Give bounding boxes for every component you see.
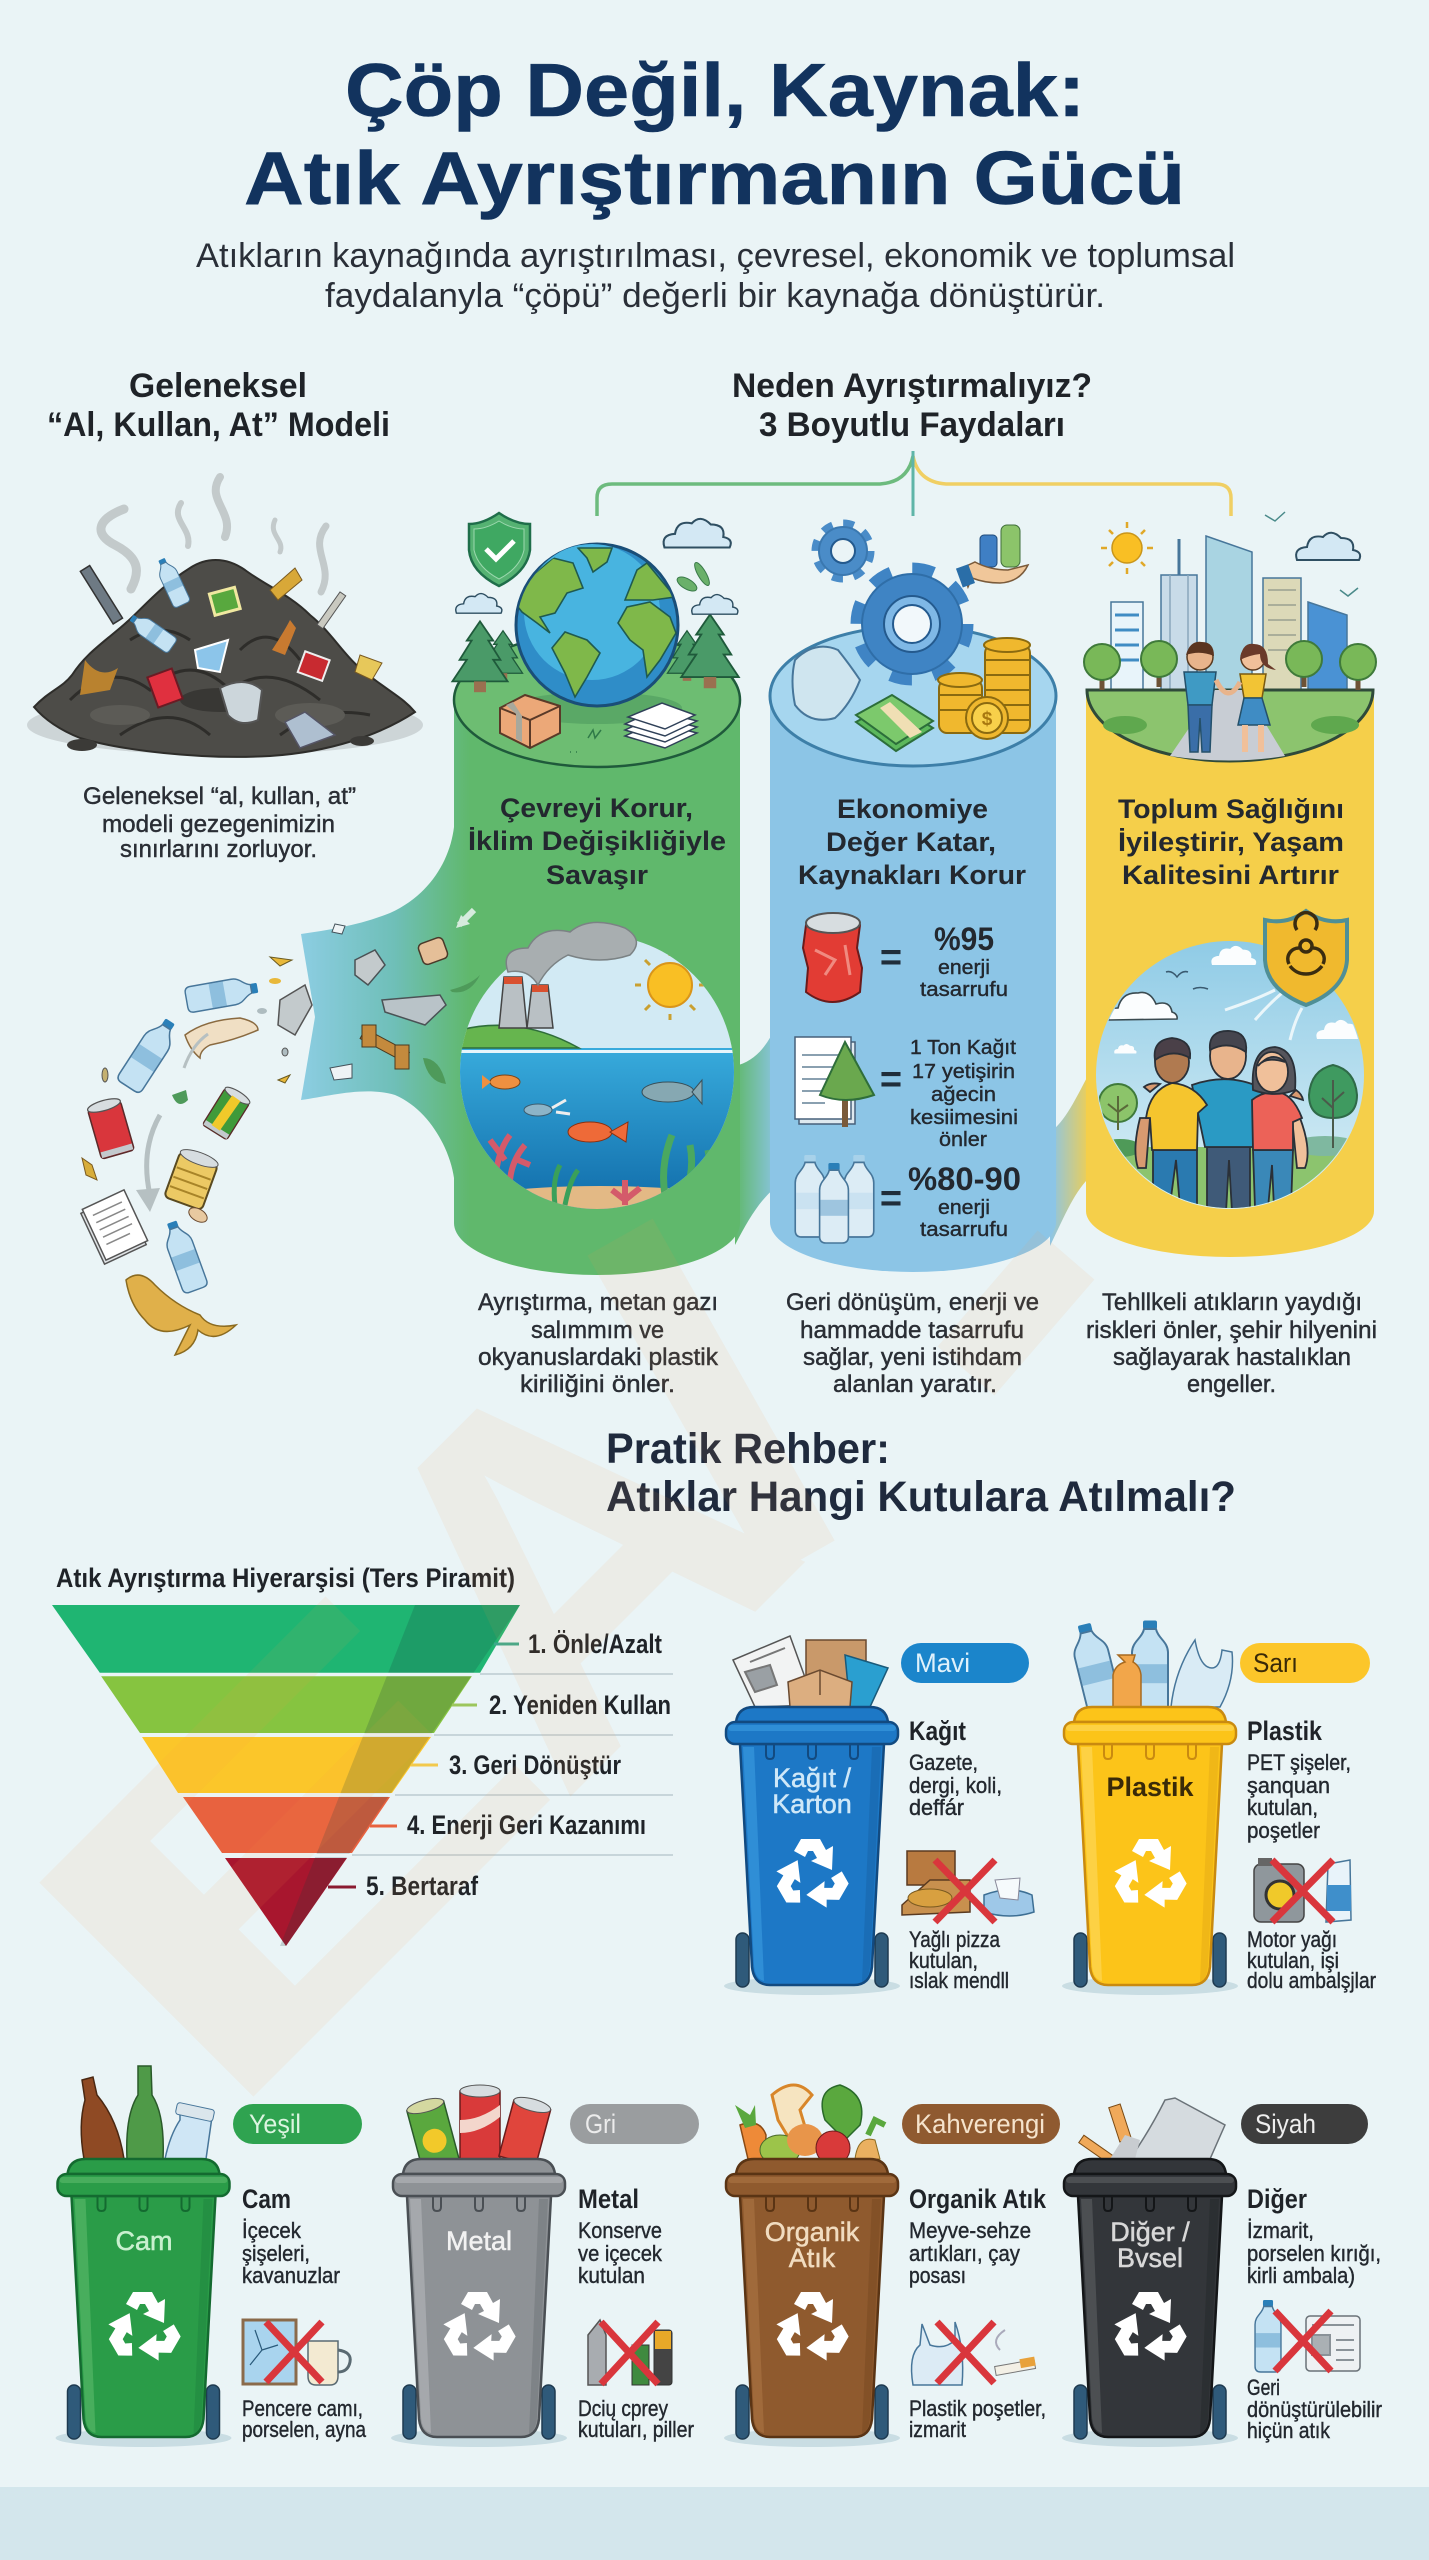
icon: biohazard shield <box>1265 911 1347 1005</box>
text: accepted paper: Gazete, <box>909 1750 978 1775</box>
text: accepted organic: Meyve-sehze <box>909 2218 1031 2243</box>
text: society heading <box>1118 794 1344 890</box>
label 5: 5. Bertaraf <box>366 1871 479 1901</box>
pill: Siyah: Siyah <box>1255 2109 1316 2139</box>
icon: not allowed bottle and newspaper <box>1255 2300 1360 2372</box>
caption: traditional model: Geleneksel “al, kullan, at” <box>83 783 356 810</box>
icon: paper stack <box>625 703 697 748</box>
text: economy heading: Kaynakları Korur <box>798 860 1027 890</box>
icon: bottles <box>795 1155 874 1243</box>
text block: environment description: kiriliğini önler. <box>520 1371 675 1398</box>
bin label: Cam <box>115 2226 173 2256</box>
text: accepted glass <box>242 2184 340 2288</box>
text block: economy description: alanlan yaratır. <box>833 1371 997 1398</box>
label 3: 3. Geri Dönüştür <box>449 1750 621 1780</box>
illustration: city with couple <box>1084 512 1376 761</box>
stat: paper and trees: ağecin <box>931 1084 996 1106</box>
panel: gray metal bin <box>391 2085 699 2447</box>
panel: society column <box>1084 512 1376 1257</box>
text block: environment description: okyanuslardaki plastik <box>478 1344 719 1371</box>
bin label: Metal <box>446 2226 512 2256</box>
heading: traditional model: “Al, Kullan, At” Modeli <box>47 406 390 444</box>
blue bin <box>724 1707 900 1995</box>
bin contents: metal cans <box>405 2085 552 2171</box>
text: rejected paper items: ıslak mendll <box>909 1968 1009 1993</box>
icon: money bundle <box>856 695 933 751</box>
brown bin <box>724 2159 900 2447</box>
title: Atık Ayrıştırmanın Gücü <box>244 136 1185 220</box>
watermark: A <box>245 1236 889 1880</box>
heading: why separate: 3 Boyutlu Faydaları <box>759 406 1065 444</box>
text block: environment description <box>478 1289 719 1398</box>
bin label: Plastik <box>1106 1772 1195 1802</box>
caption: traditional model <box>83 783 356 863</box>
disk with globe <box>452 513 740 767</box>
text: environment heading: Çevreyi Korur, <box>500 793 693 823</box>
heading: practical guide <box>606 1425 1236 1521</box>
text: accepted glass: Cam <box>242 2184 291 2214</box>
icon: recycle <box>770 2292 852 2364</box>
text block: economy description: sağlar, yeni istihdam <box>803 1344 1022 1371</box>
icon: not allowed bag and cigarette <box>912 2322 1036 2385</box>
text: environment heading: Savaşır <box>546 860 649 890</box>
subtitle <box>196 237 1235 315</box>
text: rejected glass items <box>242 2396 367 2442</box>
stat: plastic bottles: %80-90 <box>908 1161 1021 1197</box>
illustration: garbage pile <box>27 477 423 757</box>
subtitle: Atıkların kaynağında ayrıştırılması, çevresel, ekonomik ve toplumsal <box>196 237 1235 275</box>
heading: traditional model: Geleneksel <box>129 367 307 405</box>
text: accepted paper <box>909 1716 1002 1820</box>
label 1: 1. Önle/Azalt <box>528 1629 662 1659</box>
illustration: funnel floating waste <box>330 910 480 1084</box>
text: accepted organic: artıkları, çay <box>909 2241 1020 2266</box>
caption: traditional model: modeli gezegenimizin <box>102 811 335 838</box>
icon: large gear <box>857 569 967 679</box>
icon: small gear <box>816 524 870 578</box>
text: accepted organic: Organik Atık <box>909 2184 1047 2214</box>
heading: why separate <box>732 367 1092 444</box>
black bin <box>1062 2159 1238 2447</box>
bin label: Diğer / <box>1110 2217 1190 2247</box>
text: rejected organic items <box>909 2396 1046 2442</box>
bin label: Atık <box>789 2243 836 2273</box>
icon: sun <box>1101 522 1153 574</box>
text block: society description: engeller. <box>1187 1371 1276 1398</box>
pill: Sarı <box>1240 1643 1370 1683</box>
bracket connecting heading to three columns <box>597 451 1231 516</box>
text: accepted metal: Konserve <box>578 2218 662 2243</box>
subtitle: faydalanyla “çöpü” değerli bir kaynağa dönüştürür. <box>325 277 1105 315</box>
bin label: Karton <box>772 1789 852 1819</box>
bin label: Bvsel <box>1117 2243 1183 2273</box>
icon: trees <box>452 614 739 692</box>
stat: plastic bottles <box>795 1155 1021 1243</box>
connecting band: green to blue <box>735 1028 775 1245</box>
icon: not allowed pizza box and tissue <box>902 1851 1034 1922</box>
text: rejected other items: hiçün atık <box>1247 2418 1331 2443</box>
heading: practical guide: Atıklar Hangi Kutulara Atılmalı? <box>606 1473 1236 1521</box>
pyramid level 2 <box>101 1676 472 1733</box>
text: accepted organic <box>909 2184 1047 2288</box>
icon: not allowed spray and batteries <box>588 2320 672 2385</box>
text: society heading: Toplum Sağlığını <box>1118 794 1344 824</box>
panel: green glass bin <box>56 2066 367 2447</box>
illustration: healthy people circle <box>1096 941 1364 1217</box>
connecting band: blue to yellow <box>1050 1068 1092 1246</box>
chart title: Atık Ayrıştırma Hiyerarşisi (Ters Piramit) <box>56 1563 515 1593</box>
text: rejected paper items: kutulan, <box>909 1948 978 1973</box>
pill: Siyah <box>1241 2104 1368 2144</box>
icon: paper and tree <box>795 1037 874 1127</box>
text: rejected plastic items: dolu ambalşjlar <box>1247 1968 1376 1993</box>
bin label <box>772 1763 852 1819</box>
bin contents: plastic <box>1068 1620 1232 1716</box>
label 4: 4. Enerji Geri Kazanımı <box>407 1810 646 1840</box>
text: accepted other: İzmarit, <box>1247 2218 1314 2243</box>
text: environment heading <box>468 793 726 890</box>
icon: coins <box>938 638 1030 739</box>
icon: three people <box>1135 1031 1308 1212</box>
text: accepted other: porselen kırığı, <box>1247 2241 1381 2266</box>
text: accepted glass: kavanuzlar <box>242 2263 340 2288</box>
pyramid level 1 <box>52 1605 520 1673</box>
text: rejected metal items <box>578 2396 694 2442</box>
panel: black general waste bin <box>1062 2098 1382 2447</box>
disk with gears <box>770 524 1056 766</box>
text: accepted plastic: Plastik <box>1247 1716 1323 1746</box>
text: rejected other items <box>1247 2375 1382 2443</box>
stat: paper and trees: = <box>880 1059 902 1101</box>
illustration: scattered waste stream <box>80 957 312 1355</box>
green bin <box>56 2159 232 2447</box>
icon: not allowed oil can and carton <box>1254 1858 1351 1922</box>
stat: aluminium can: %95 <box>934 921 994 957</box>
text block: economy description <box>786 1289 1039 1398</box>
heading: why separate: Neden Ayrıştırmalıyız? <box>732 367 1092 405</box>
text: rejected glass items: porselen, ayna <box>242 2417 367 2442</box>
pill: Mavi: Mavi <box>915 1648 970 1678</box>
text: accepted glass: şişeleri, <box>242 2241 310 2266</box>
text: rejected organic items: Plastik poşetler, <box>909 2396 1046 2421</box>
text: accepted plastic: poşetler <box>1247 1818 1320 1843</box>
text: rejected plastic items <box>1247 1927 1376 1993</box>
stat: paper and trees: önler <box>939 1129 987 1151</box>
stat: aluminium can <box>803 913 1008 1002</box>
icon: hand with bottles <box>956 525 1028 587</box>
stat: paper and trees: 1 Ton Kağıt <box>910 1037 1016 1059</box>
text: rejected other items: dönüştürülebilir <box>1247 2397 1382 2422</box>
icon: leaves <box>675 561 712 594</box>
chart: waste hierarchy inverted pyramid <box>52 1563 673 1946</box>
text block: society description: Tehllkeli atıkların yaydığı <box>1102 1289 1362 1316</box>
icon: clouds <box>456 519 738 614</box>
icon: not allowed window and mug <box>243 2320 350 2385</box>
pill: Gri <box>570 2104 699 2144</box>
bin contents: general waste <box>1079 2098 1225 2166</box>
text block: economy description: hammadde tasarrufu <box>800 1317 1024 1344</box>
text: rejected metal items: kutuları, piller <box>578 2417 694 2442</box>
panel: economy column <box>770 524 1056 1272</box>
stat: plastic bottles: tasarrufu <box>920 1219 1008 1241</box>
text: rejected metal items: Dcių cprey <box>578 2396 668 2421</box>
pill: Kahverengi: Kahverengi <box>915 2109 1045 2139</box>
text: accepted paper: deffár <box>909 1795 964 1820</box>
panel: yellow plastic bin <box>1062 1620 1376 1995</box>
bin contents: glass <box>81 2066 215 2159</box>
text: rejected glass items: Pencere camı, <box>242 2396 363 2421</box>
text block: society description: sağlayarak hastalıklan <box>1113 1344 1351 1371</box>
text: environment heading: İklim Değişikliğiyle <box>468 826 726 856</box>
text: rejected organic items: izmarit <box>909 2417 966 2442</box>
label 2: 2. Yeniden Kullan <box>489 1690 671 1720</box>
bin contents: paper <box>733 1636 888 1707</box>
title <box>244 48 1185 220</box>
watermark <box>0 1236 1066 2198</box>
icon: globe <box>516 544 678 706</box>
pyramid level 3 <box>142 1737 431 1793</box>
stat: plastic bottles: = <box>880 1178 902 1220</box>
text: accepted plastic: şanquan <box>1247 1773 1330 1798</box>
text: rejected paper items <box>909 1927 1009 1993</box>
icon: cloud <box>1296 533 1360 560</box>
text: rejected other items: Geri <box>1247 2375 1280 2400</box>
icon: cardboard box <box>500 695 560 748</box>
pyramid level 4 <box>183 1797 390 1853</box>
gray bin <box>391 2159 567 2447</box>
panel: brown organic bin <box>724 2085 1060 2447</box>
stat: plastic bottles: enerji <box>938 1197 990 1219</box>
icon: factory smoke <box>506 922 636 985</box>
illustration: ocean pollution circle <box>460 922 734 1209</box>
panel: blue paper bin <box>724 1636 1034 1995</box>
text: economy heading: Değer Katar, <box>826 827 996 857</box>
icon: couple <box>1184 642 1276 752</box>
pill: Sarı: Sarı <box>1253 1648 1298 1678</box>
bin contents: food scraps <box>735 2085 885 2165</box>
text: accepted other <box>1247 2184 1381 2288</box>
stat: aluminium can: tasarrufu <box>920 979 1008 1001</box>
disk with gears: $ <box>982 709 993 730</box>
text: accepted plastic: kutulan, <box>1247 1795 1318 1820</box>
text: accepted metal: ve içecek <box>578 2241 663 2266</box>
text: accepted glass: İçecek <box>242 2218 302 2243</box>
panel: environment column <box>301 513 750 1275</box>
pyramid level 5 <box>225 1858 347 1946</box>
text: society heading: İyileştirir, Yaşam <box>1118 827 1344 857</box>
icon: recycle <box>1108 1839 1190 1911</box>
text: accepted paper: Kağıt <box>909 1716 966 1746</box>
text block: environment description: Ayrıştırma, metan gazı <box>478 1289 718 1316</box>
text block: economy description: Geri dönüşüm, enerji ve <box>786 1289 1039 1316</box>
text: accepted metal: kutulan <box>578 2263 645 2288</box>
text: accepted other: kirli ambala) <box>1247 2263 1355 2288</box>
caption: traditional model: sınırlarını zorluyor. <box>120 836 317 863</box>
stat: paper and trees: 17 yetişirin <box>912 1061 1015 1083</box>
text: rejected plastic items: Motor yağı <box>1247 1927 1337 1952</box>
text: accepted plastic: PET şişeler, <box>1247 1750 1351 1775</box>
icon: shield <box>469 513 530 586</box>
text: accepted metal <box>578 2184 663 2288</box>
stat: aluminium can: enerji <box>938 957 990 979</box>
icon: recycle <box>437 2292 519 2364</box>
pill: Yeşil <box>233 2104 362 2144</box>
icon: crushed can <box>803 913 862 1002</box>
text block: society description: riskleri önler, şehir hilyenini <box>1086 1317 1377 1344</box>
heading: practical guide: Pratik Rehber: <box>606 1425 890 1473</box>
stat: paper and trees <box>795 1037 1018 1151</box>
text block: society description <box>1086 1289 1377 1398</box>
yellow bin <box>1062 1707 1238 1995</box>
text: accepted paper: dergi, koli, <box>909 1773 1002 1798</box>
title: Çöp Değil, Kaynak: <box>345 48 1085 132</box>
bin label: Organik <box>765 2217 860 2247</box>
icon: recycle <box>102 2292 184 2364</box>
text: economy heading <box>798 794 1027 890</box>
stat: paper and trees: kesiimesini <box>910 1107 1018 1129</box>
pill: Kahverengi <box>902 2104 1060 2144</box>
pill: Yeşil: Yeşil <box>249 2109 301 2139</box>
text: accepted other: Diğer <box>1247 2184 1307 2214</box>
pill: Gri: Gri <box>585 2109 616 2139</box>
icon: recycle <box>770 1839 852 1911</box>
icon: recycle <box>1108 2292 1190 2364</box>
text: rejected plastic items: kutulan, işi <box>1247 1948 1339 1973</box>
text: economy heading: Ekonomiye <box>837 794 988 824</box>
text block: environment description: salımmım ve <box>531 1317 664 1344</box>
bin label <box>765 2217 860 2273</box>
text: accepted plastic <box>1247 1716 1351 1843</box>
text: accepted metal: Metal <box>578 2184 639 2214</box>
bin label <box>1110 2217 1190 2273</box>
heading: traditional model <box>47 367 390 444</box>
stat: aluminium can: = <box>880 937 902 979</box>
bin label: Kağıt / <box>773 1763 852 1793</box>
pill: Mavi <box>901 1643 1029 1683</box>
text: rejected paper items: Yağlı pizza <box>909 1927 1001 1952</box>
icon: crumpled plastic <box>792 647 860 720</box>
text: accepted organic: posası <box>909 2263 966 2288</box>
text: society heading: Kalitesini Artırır <box>1122 860 1340 890</box>
